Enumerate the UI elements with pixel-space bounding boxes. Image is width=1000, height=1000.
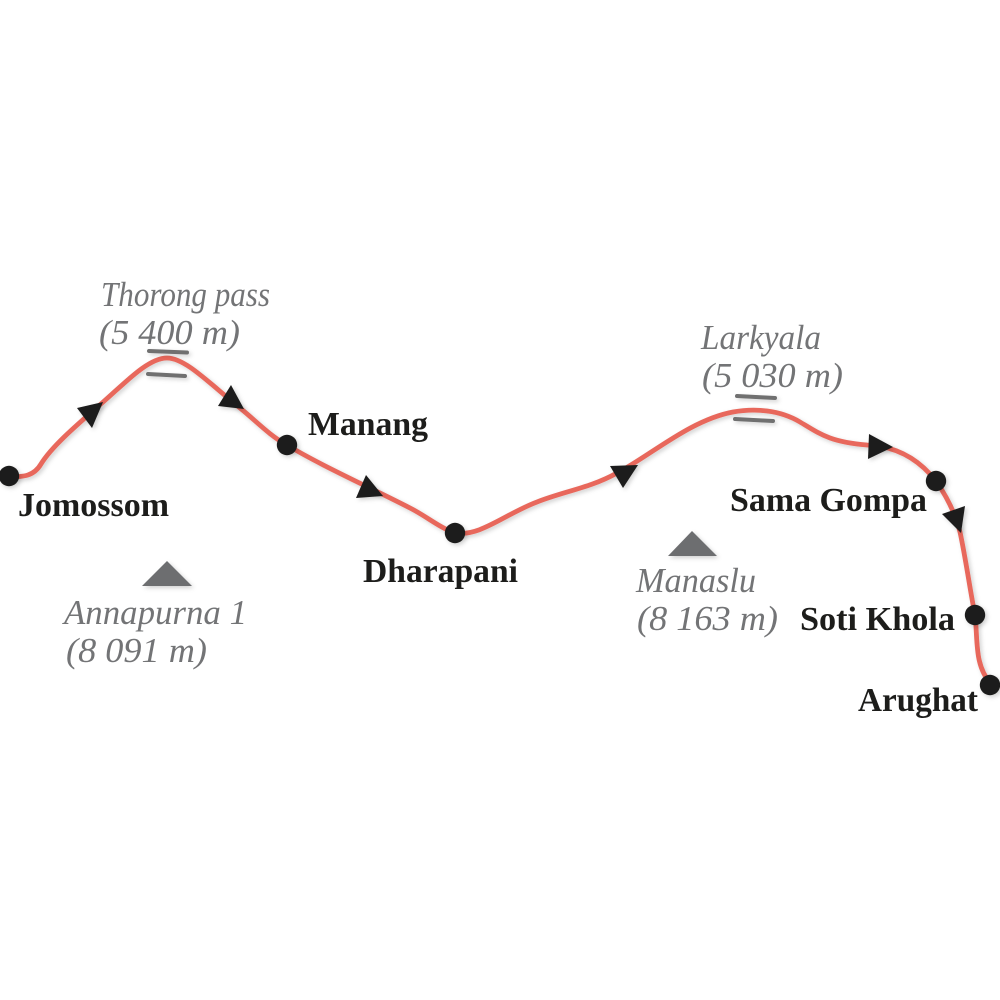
route line bbox=[8, 358, 991, 684]
label: Annapurna 1: (8 091 m) bbox=[66, 631, 207, 670]
place labels: Soti Khola bbox=[800, 601, 955, 638]
place labels: Arughat bbox=[858, 682, 979, 719]
label: Thorong pass bbox=[99, 275, 270, 352]
label: Larkyala bbox=[700, 318, 843, 395]
label: Manaslu: Manaslu bbox=[635, 561, 756, 600]
label: Manaslu bbox=[635, 561, 778, 638]
pass markers: Larkyala bbox=[735, 396, 775, 421]
mountain icon: Manaslu bbox=[668, 531, 717, 556]
label: Annapurna 1: Annapurna 1 bbox=[62, 593, 247, 632]
place labels: Manang bbox=[308, 406, 428, 443]
label: Thorong pass: (5 400 m) bbox=[99, 313, 240, 352]
place labels bbox=[18, 406, 979, 719]
pass markers: Thorong bbox=[148, 351, 187, 376]
place labels: Jomossom bbox=[18, 487, 169, 524]
stop markers bbox=[0, 435, 1000, 695]
direction arrows bbox=[77, 385, 965, 533]
label: Annapurna 1 bbox=[62, 593, 247, 670]
label: Larkyala: Larkyala bbox=[700, 318, 821, 357]
label: Thorong pass: Thorong pass bbox=[101, 275, 270, 314]
place labels: Sama Gompa bbox=[730, 482, 927, 519]
mountain icon: Annapurna 1 bbox=[142, 561, 192, 586]
label: Manaslu: (8 163 m) bbox=[637, 599, 778, 638]
place labels: Dharapani bbox=[363, 553, 518, 590]
label: Larkyala: (5 030 m) bbox=[702, 356, 843, 395]
